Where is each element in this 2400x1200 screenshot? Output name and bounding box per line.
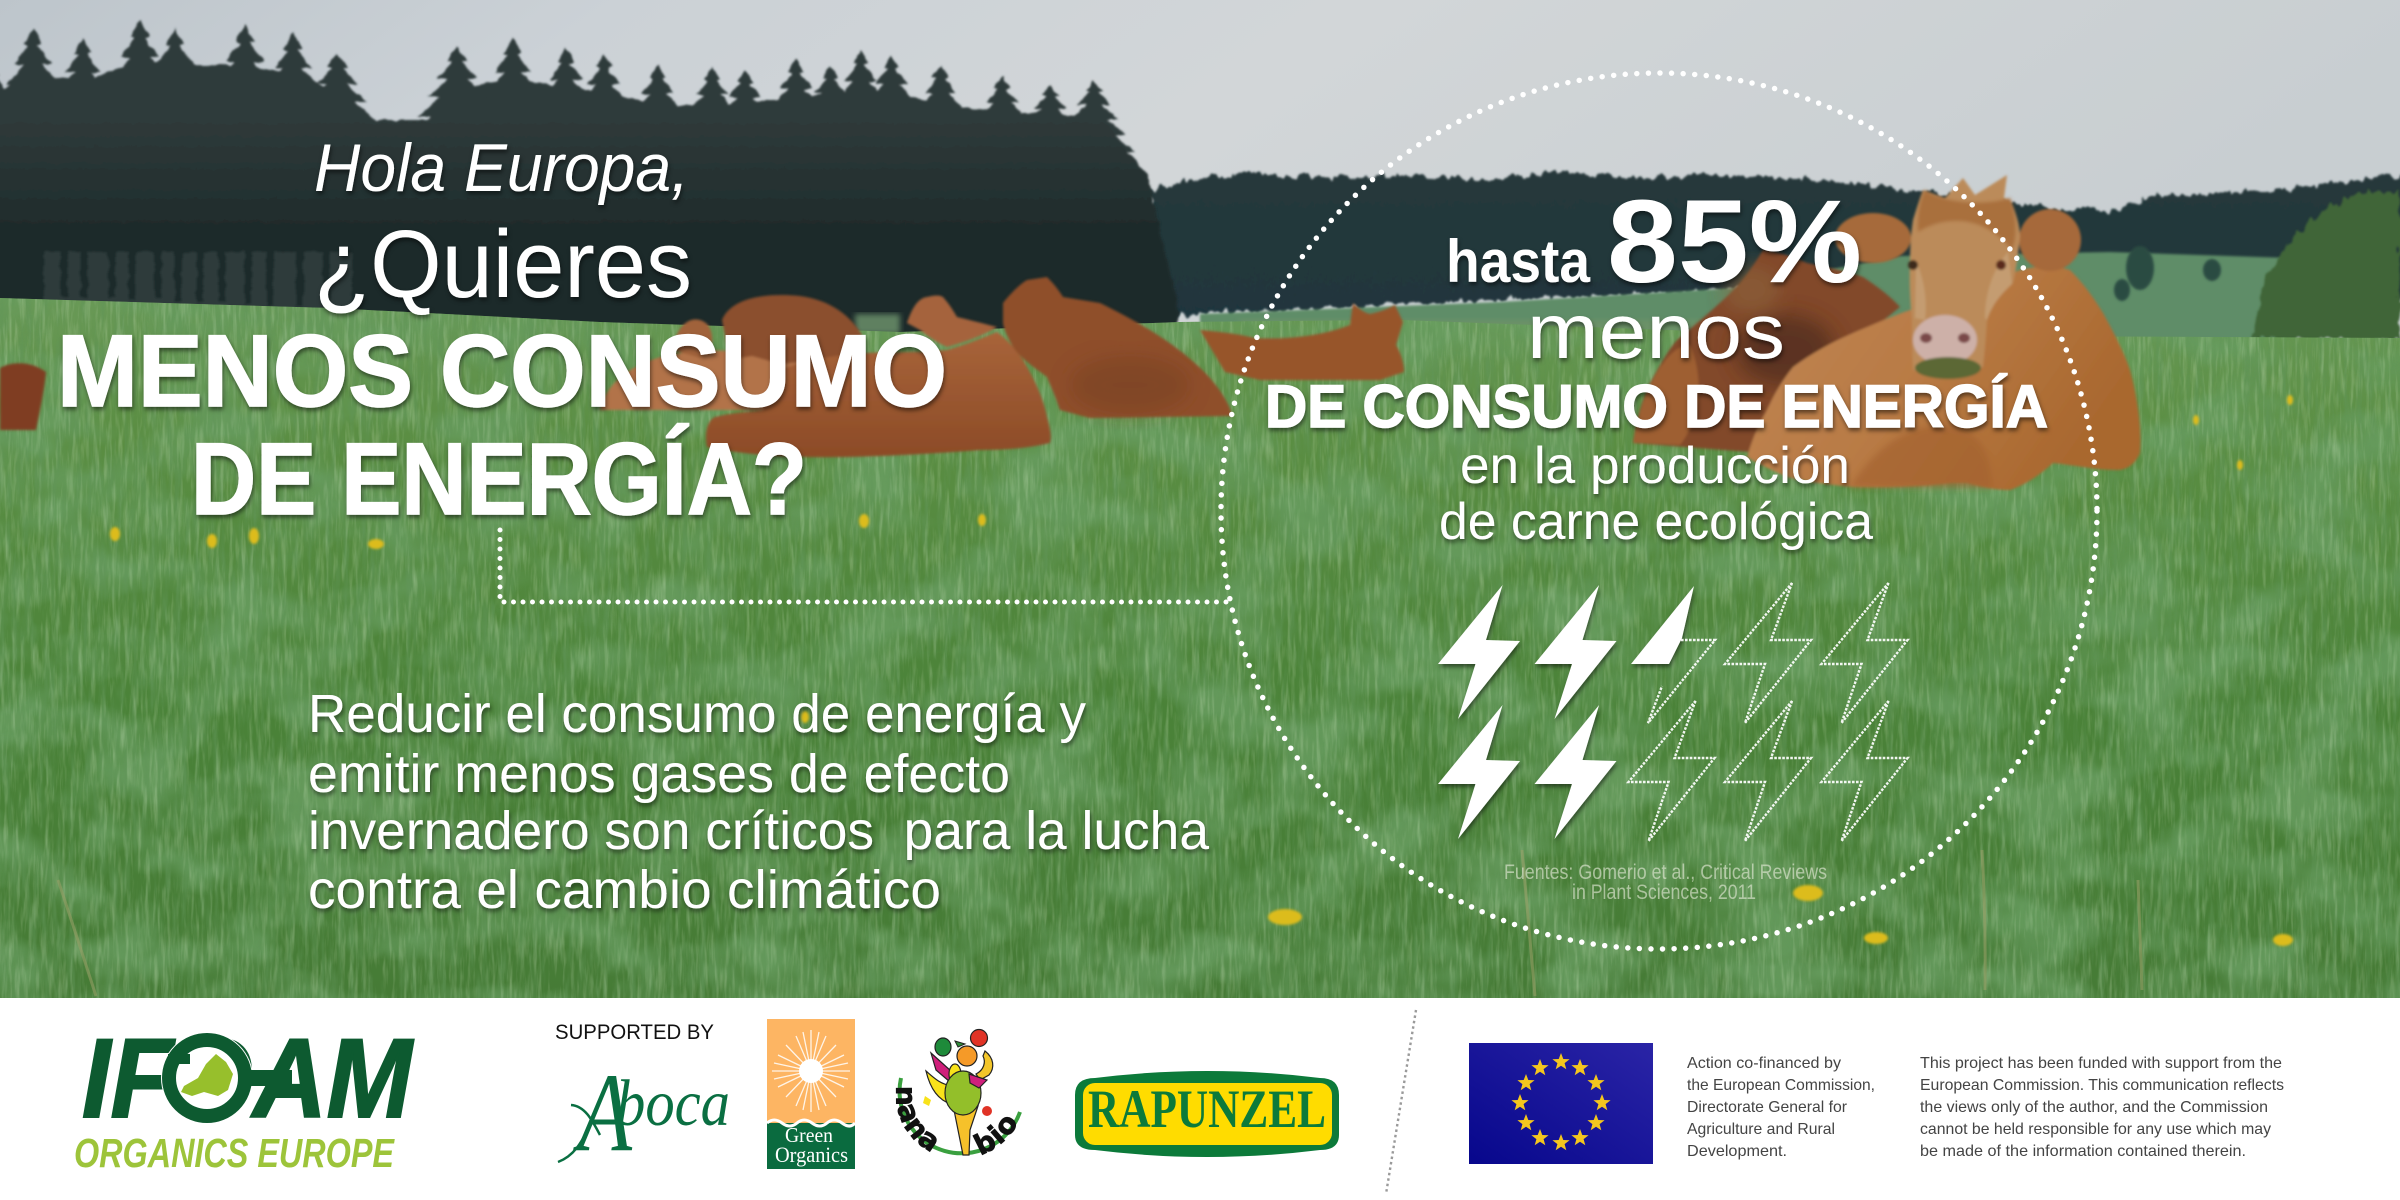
logo: IFOAM Organics Europe: ORGANICS EUROPE xyxy=(74,1130,395,1176)
EU disclaimer: the views only of the author, and the Commission xyxy=(1920,1099,2268,1116)
statistic: 85%: hasta xyxy=(1446,228,1591,295)
body text: Reducir el consumo de energía y xyxy=(308,684,1086,744)
body text: emitir menos gases de efecto xyxy=(308,744,1010,804)
headline question: MENOS CONSUMO xyxy=(57,314,947,428)
EU disclaimer: This project has been funded with support from the xyxy=(1920,1055,2282,1072)
dotted circle callout frame xyxy=(1221,73,2097,949)
hill behind the cows xyxy=(1200,252,2290,345)
cow: head up in the middle xyxy=(1003,277,1232,418)
pale gap and distant field under left tree crowns xyxy=(40,250,360,304)
logo: nana bio: nana xyxy=(896,1088,937,1152)
body text xyxy=(308,684,1210,920)
sky xyxy=(0,0,2400,340)
statistic: 85%: menos xyxy=(1527,287,1785,375)
supported by label: SUPPORTED BY xyxy=(555,1021,714,1044)
cow: left edge xyxy=(0,363,46,430)
headline question: ¿Quieres xyxy=(314,211,692,318)
dotted divider xyxy=(1386,1010,1416,1194)
logo: Green Organics: Green xyxy=(785,1123,833,1147)
dotted connector from question to circle xyxy=(500,530,1230,602)
large tree on the right xyxy=(2252,190,2400,342)
row of dark trees xyxy=(0,20,1178,340)
logo: Aboca xyxy=(558,1051,730,1175)
cow: head behind lying cow xyxy=(907,296,997,347)
outlined bolts xyxy=(1628,583,1908,841)
filled bolts xyxy=(1438,585,1694,839)
co-financing note: Action co-financed by xyxy=(1687,1055,1841,1072)
cow: tan, behind headline xyxy=(600,319,800,410)
logo: Aboca: A xyxy=(572,1051,632,1175)
co-financing note: Directorate General for xyxy=(1687,1099,1848,1116)
body text: contra el cambio climático xyxy=(308,860,941,920)
cow: back left xyxy=(722,295,862,364)
co-financing note: Development. xyxy=(1687,1143,1787,1160)
logo: nana bio: bio xyxy=(972,1116,1016,1156)
logo: Green Organics: Organics xyxy=(775,1142,848,1167)
distant forest xyxy=(1150,172,2400,320)
EU disclaimer: be made of the information contained therein. xyxy=(1920,1143,2246,1160)
co-financing note xyxy=(1687,1055,1875,1160)
co-financing note: Agriculture and Rural xyxy=(1687,1121,1835,1138)
bushes on the hill xyxy=(2114,246,2221,301)
statistic: 85%: de carne ecológica xyxy=(1439,493,1873,551)
EU disclaimer: European Commission. This communication reflects xyxy=(1920,1077,2284,1094)
icon: energy bolts, 2.5 of 5 and 2 of 5 filled xyxy=(1438,583,1908,841)
EU flag xyxy=(1469,1043,1653,1164)
pale gap between far trees near the cows xyxy=(855,314,900,334)
cow: main foreground xyxy=(1747,175,2141,490)
statistic: 85%: 85% xyxy=(1607,176,1862,308)
cow: lying foreground xyxy=(706,332,1051,457)
meadow xyxy=(0,290,2400,998)
logo: Green Organics xyxy=(767,1019,855,1169)
statistic: 85%: DE CONSUMO DE ENERGÍA xyxy=(1265,373,2048,440)
logo: nana bio xyxy=(896,1028,1022,1156)
cow: right of middle xyxy=(1200,303,1404,380)
cow: dark behind main cow xyxy=(1633,250,1900,452)
logo: IFOAM Organics Europe: IFOAM xyxy=(82,1016,414,1141)
source note: in Plant Sciences, 2011 xyxy=(1572,881,1756,904)
dandelions xyxy=(110,395,2293,946)
headline question: Hola Europa, xyxy=(314,130,689,206)
cows xyxy=(0,175,2141,490)
logo: Rapunzel xyxy=(1075,1071,1339,1157)
footer band xyxy=(0,998,2400,1200)
body text: invernadero son críticos para la lucha xyxy=(308,801,1210,861)
EU disclaimer xyxy=(1920,1055,2284,1160)
co-financing note: the European Commission, xyxy=(1687,1077,1875,1094)
EU disclaimer: cannot be held responsible for any use which may xyxy=(1920,1121,2271,1138)
headline question: DE ENERGÍA? xyxy=(191,422,807,536)
dry grass stems xyxy=(58,850,2142,996)
logo: Aboca: boca xyxy=(616,1067,730,1140)
statistic: 85%: en la producción xyxy=(1460,437,1850,495)
source note: Fuentes: Gomerio et al., Critical Reviews xyxy=(1504,861,1827,884)
source note xyxy=(1504,861,1827,904)
headline question xyxy=(57,130,947,536)
statistic: 85% xyxy=(1265,176,2048,551)
pale meadow strip at the forest foot xyxy=(1240,320,1760,344)
logo: Rapunzel: RAPUNZEL xyxy=(1088,1079,1326,1139)
